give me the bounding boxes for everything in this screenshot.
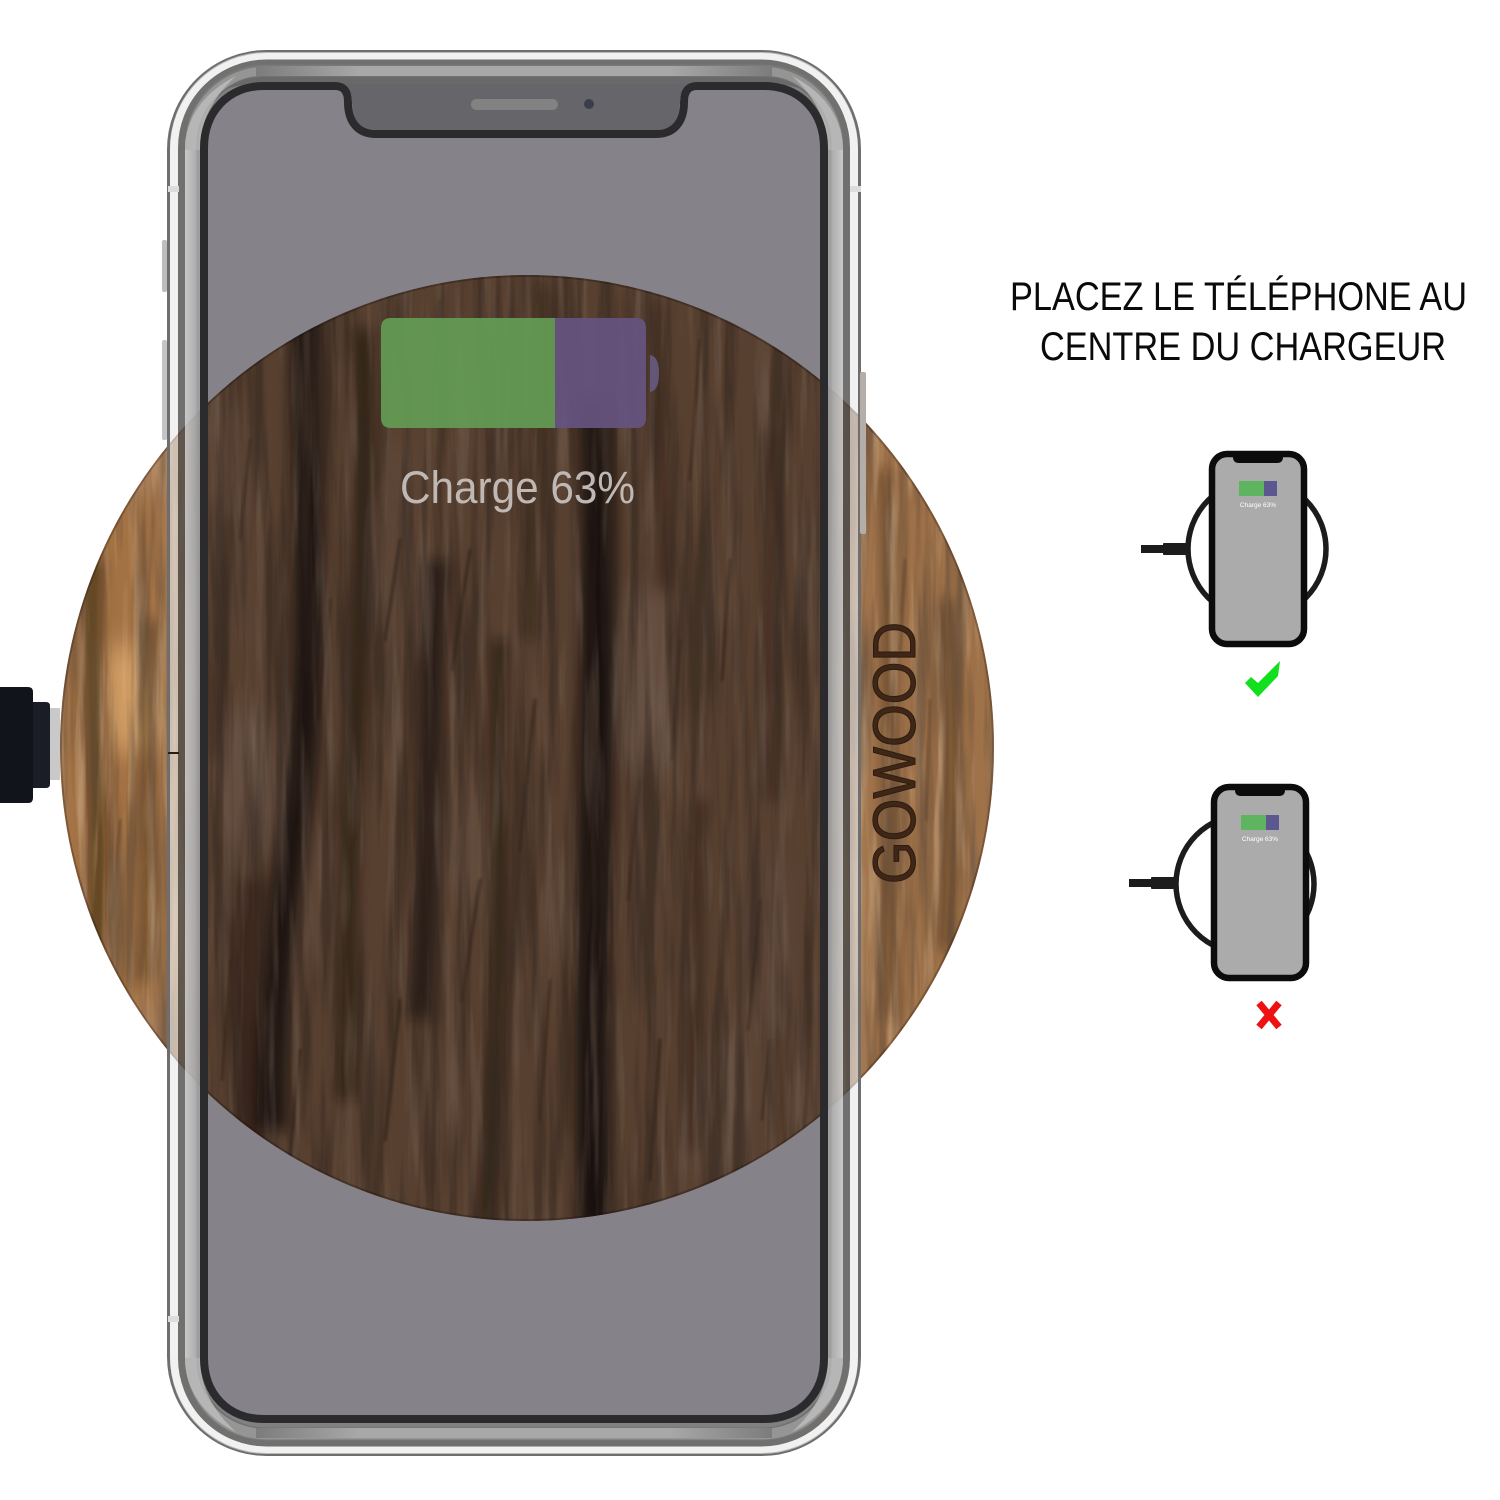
correct placement diagram — [1141, 452, 1326, 697]
frame light side panels — [185, 150, 843, 1358]
phone screen — [204, 86, 824, 1419]
charger ring off-center — [1176, 815, 1314, 953]
battery indicator — [381, 318, 659, 428]
charge percentage label: Charge 63% — [400, 462, 635, 513]
small battery — [1241, 815, 1279, 830]
incorrect placement diagram — [1129, 785, 1314, 1027]
small phone — [1212, 454, 1304, 644]
cable — [1129, 877, 1175, 889]
small label: Charge 63% — [1242, 836, 1278, 843]
small notch — [1235, 785, 1285, 796]
charger ring centered — [1188, 480, 1326, 618]
green check mark — [1245, 661, 1280, 697]
small phone — [1214, 787, 1306, 978]
frame top and bottom bands with corner wedges — [185, 66, 843, 1438]
instruction heading — [1010, 274, 1467, 369]
small label: Charge 63% — [1240, 502, 1276, 509]
small notch — [1233, 452, 1283, 463]
engraved GOWOOD logo: GOWOOD — [861, 622, 928, 884]
front camera — [584, 99, 594, 109]
wooden wireless charger — [55, 270, 1000, 1230]
charging cable — [0, 687, 60, 803]
small battery — [1239, 481, 1277, 496]
red cross mark — [1259, 1003, 1279, 1027]
instruction heading: CENTRE DU CHARGEUR — [1040, 325, 1446, 369]
side buttons — [162, 186, 866, 1322]
speaker grille — [471, 99, 558, 110]
cable — [1141, 543, 1186, 555]
main phone — [162, 52, 866, 1454]
phone frame bands — [168, 52, 860, 1454]
black screen bezel — [204, 86, 824, 1419]
notch and top bezel — [224, 76, 804, 130]
